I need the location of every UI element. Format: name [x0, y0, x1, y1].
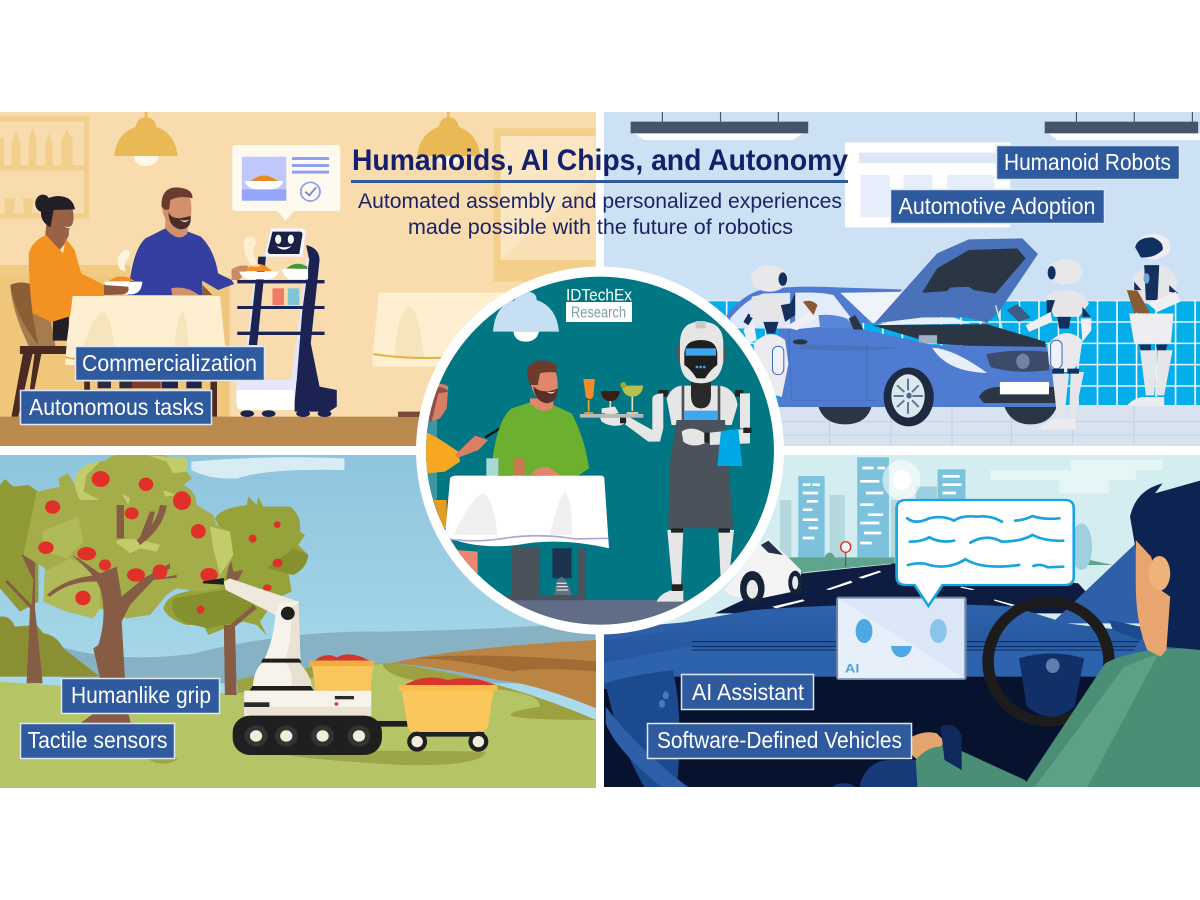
ceiling lamps — [114, 112, 480, 166]
ceiling lights — [631, 112, 1200, 140]
IDTechEx Research logo — [566, 286, 632, 322]
man diner — [128, 187, 249, 295]
wall frame — [494, 128, 595, 282]
floor — [415, 600, 785, 635]
robot at car door — [743, 265, 818, 397]
subtitle: Automated assembly and personalized experiences — [358, 189, 842, 213]
humanoid waiter robot — [625, 321, 752, 602]
centre circle: restaurant humanoid waiter — [415, 265, 785, 635]
trunk base — [81, 714, 131, 723]
AI display — [837, 598, 965, 679]
left tree — [0, 479, 43, 683]
trailer basket — [377, 678, 498, 752]
steering wheel — [988, 602, 1109, 722]
left hill — [0, 616, 100, 677]
label: Software-Defined Vehicles: Software-Defined Vehicles — [657, 727, 902, 753]
label: Humanoid Robots: Humanoid Robots — [1004, 149, 1171, 175]
panel: AI assistant in software-defined vehicle — [600, 450, 1200, 790]
main apple tree — [23, 454, 233, 678]
speech bubble with squiggles — [897, 500, 1074, 606]
table and bowl — [65, 250, 230, 417]
blue car — [727, 238, 1057, 426]
tile wall — [707, 301, 1200, 405]
woman at table — [425, 384, 500, 575]
white table — [445, 476, 609, 600]
label: Humanlike grip: Humanlike grip — [71, 682, 211, 708]
apples — [38, 471, 283, 614]
man in green — [486, 360, 589, 476]
fields — [0, 640, 600, 790]
city skyline — [780, 457, 1163, 560]
shelves with bottles — [0, 116, 89, 219]
road — [715, 563, 1105, 613]
woman diner — [28, 194, 118, 341]
label: Tactile sensors: Tactile sensors — [28, 727, 168, 753]
panel: humanoid robots in automotive workshop — [600, 110, 1200, 450]
roadside — [784, 523, 1113, 574]
second table — [372, 293, 509, 417]
tray with drinks — [580, 379, 643, 426]
robot with clipboard — [1127, 234, 1180, 406]
panel: restaurant service robot — [0, 110, 600, 450]
floor — [0, 416, 420, 446]
label: Humanlike grip — [62, 678, 220, 714]
label: Software-Defined Vehicles — [648, 724, 912, 758]
label: Tactile sensors — [20, 724, 174, 758]
title: Humanoids, AI Chips, and Autonomy — [352, 144, 848, 177]
serving robot — [237, 228, 337, 417]
label: Automotive Adoption: Automotive Adoption — [898, 193, 1096, 219]
floor — [778, 404, 1200, 446]
panel: apple picking robot in orchard — [0, 450, 600, 790]
subtitle: made possible with the future of robotics — [408, 215, 793, 239]
subtitle — [358, 189, 842, 239]
workshop window — [845, 142, 1010, 227]
white car — [724, 538, 802, 606]
title rule — [351, 180, 848, 183]
label: AI Assistant — [682, 674, 814, 710]
apple picker robot — [203, 578, 382, 755]
driver — [912, 481, 1200, 790]
label: AI Assistant: AI Assistant — [692, 679, 805, 705]
shadow — [145, 751, 486, 765]
IDTechEx Research logo: Research — [571, 304, 626, 322]
back right tree — [163, 497, 308, 695]
lamp — [493, 292, 559, 342]
dashboard — [600, 543, 1174, 790]
speech bubble with menu — [232, 145, 340, 221]
IDTechEx Research logo: IDTechEx — [566, 286, 632, 304]
basket on robot — [309, 654, 374, 691]
AI display: AI — [845, 661, 859, 675]
label: Autonomous tasks: Autonomous tasks — [29, 394, 204, 420]
chair — [10, 282, 67, 417]
robot with tablet — [1007, 259, 1091, 429]
mountains — [61, 622, 595, 683]
label: Commercialization: Commercialization — [82, 350, 257, 376]
